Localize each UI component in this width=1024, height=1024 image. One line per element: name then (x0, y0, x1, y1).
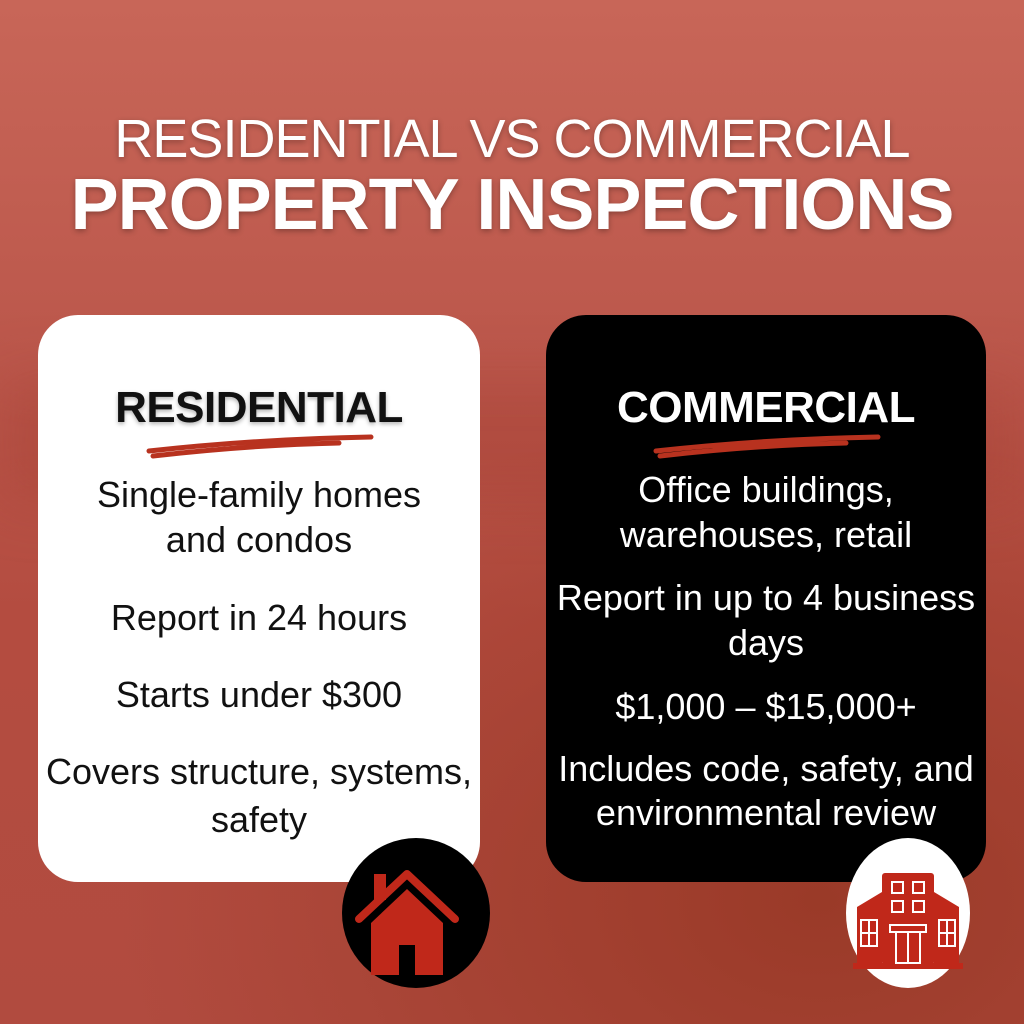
list: commercial facts: days (728, 622, 804, 663)
title line 1: RESIDENTIAL VS COMMERCIAL (114, 109, 910, 169)
list: residential facts: Starts under $300 (116, 674, 402, 715)
list: residential facts: safety (211, 799, 307, 840)
list: residential facts (46, 474, 472, 840)
list: commercial facts: Report in up to 4 business (557, 577, 975, 618)
list: residential facts: and condos (166, 519, 352, 560)
title line 2: PROPERTY INSPECTIONS (71, 165, 953, 245)
panel: residential (38, 315, 480, 882)
panel: commercial (546, 315, 986, 882)
list: residential facts: Covers structure, systems, (46, 751, 472, 792)
underline swoosh (654, 434, 880, 458)
background shading (0, 380, 1024, 500)
list: commercial facts: $1,000 – $15,000+ (615, 686, 917, 727)
icon: office building (846, 838, 970, 988)
heading: residential: RESIDENTIAL (115, 383, 403, 432)
list: residential facts: Report in 24 hours (111, 597, 407, 638)
heading: commercial: COMMERCIAL (617, 383, 915, 432)
list: commercial facts: Includes code, safety, and (558, 748, 974, 789)
list: residential facts: Single-family homes (97, 474, 421, 515)
icon: house (342, 838, 490, 988)
list: commercial facts: warehouses, retail (620, 514, 912, 555)
list: commercial facts: environmental review (596, 792, 936, 833)
underline swoosh (146, 434, 374, 458)
list: commercial facts (557, 469, 975, 833)
list: commercial facts: Office buildings, (638, 469, 894, 510)
